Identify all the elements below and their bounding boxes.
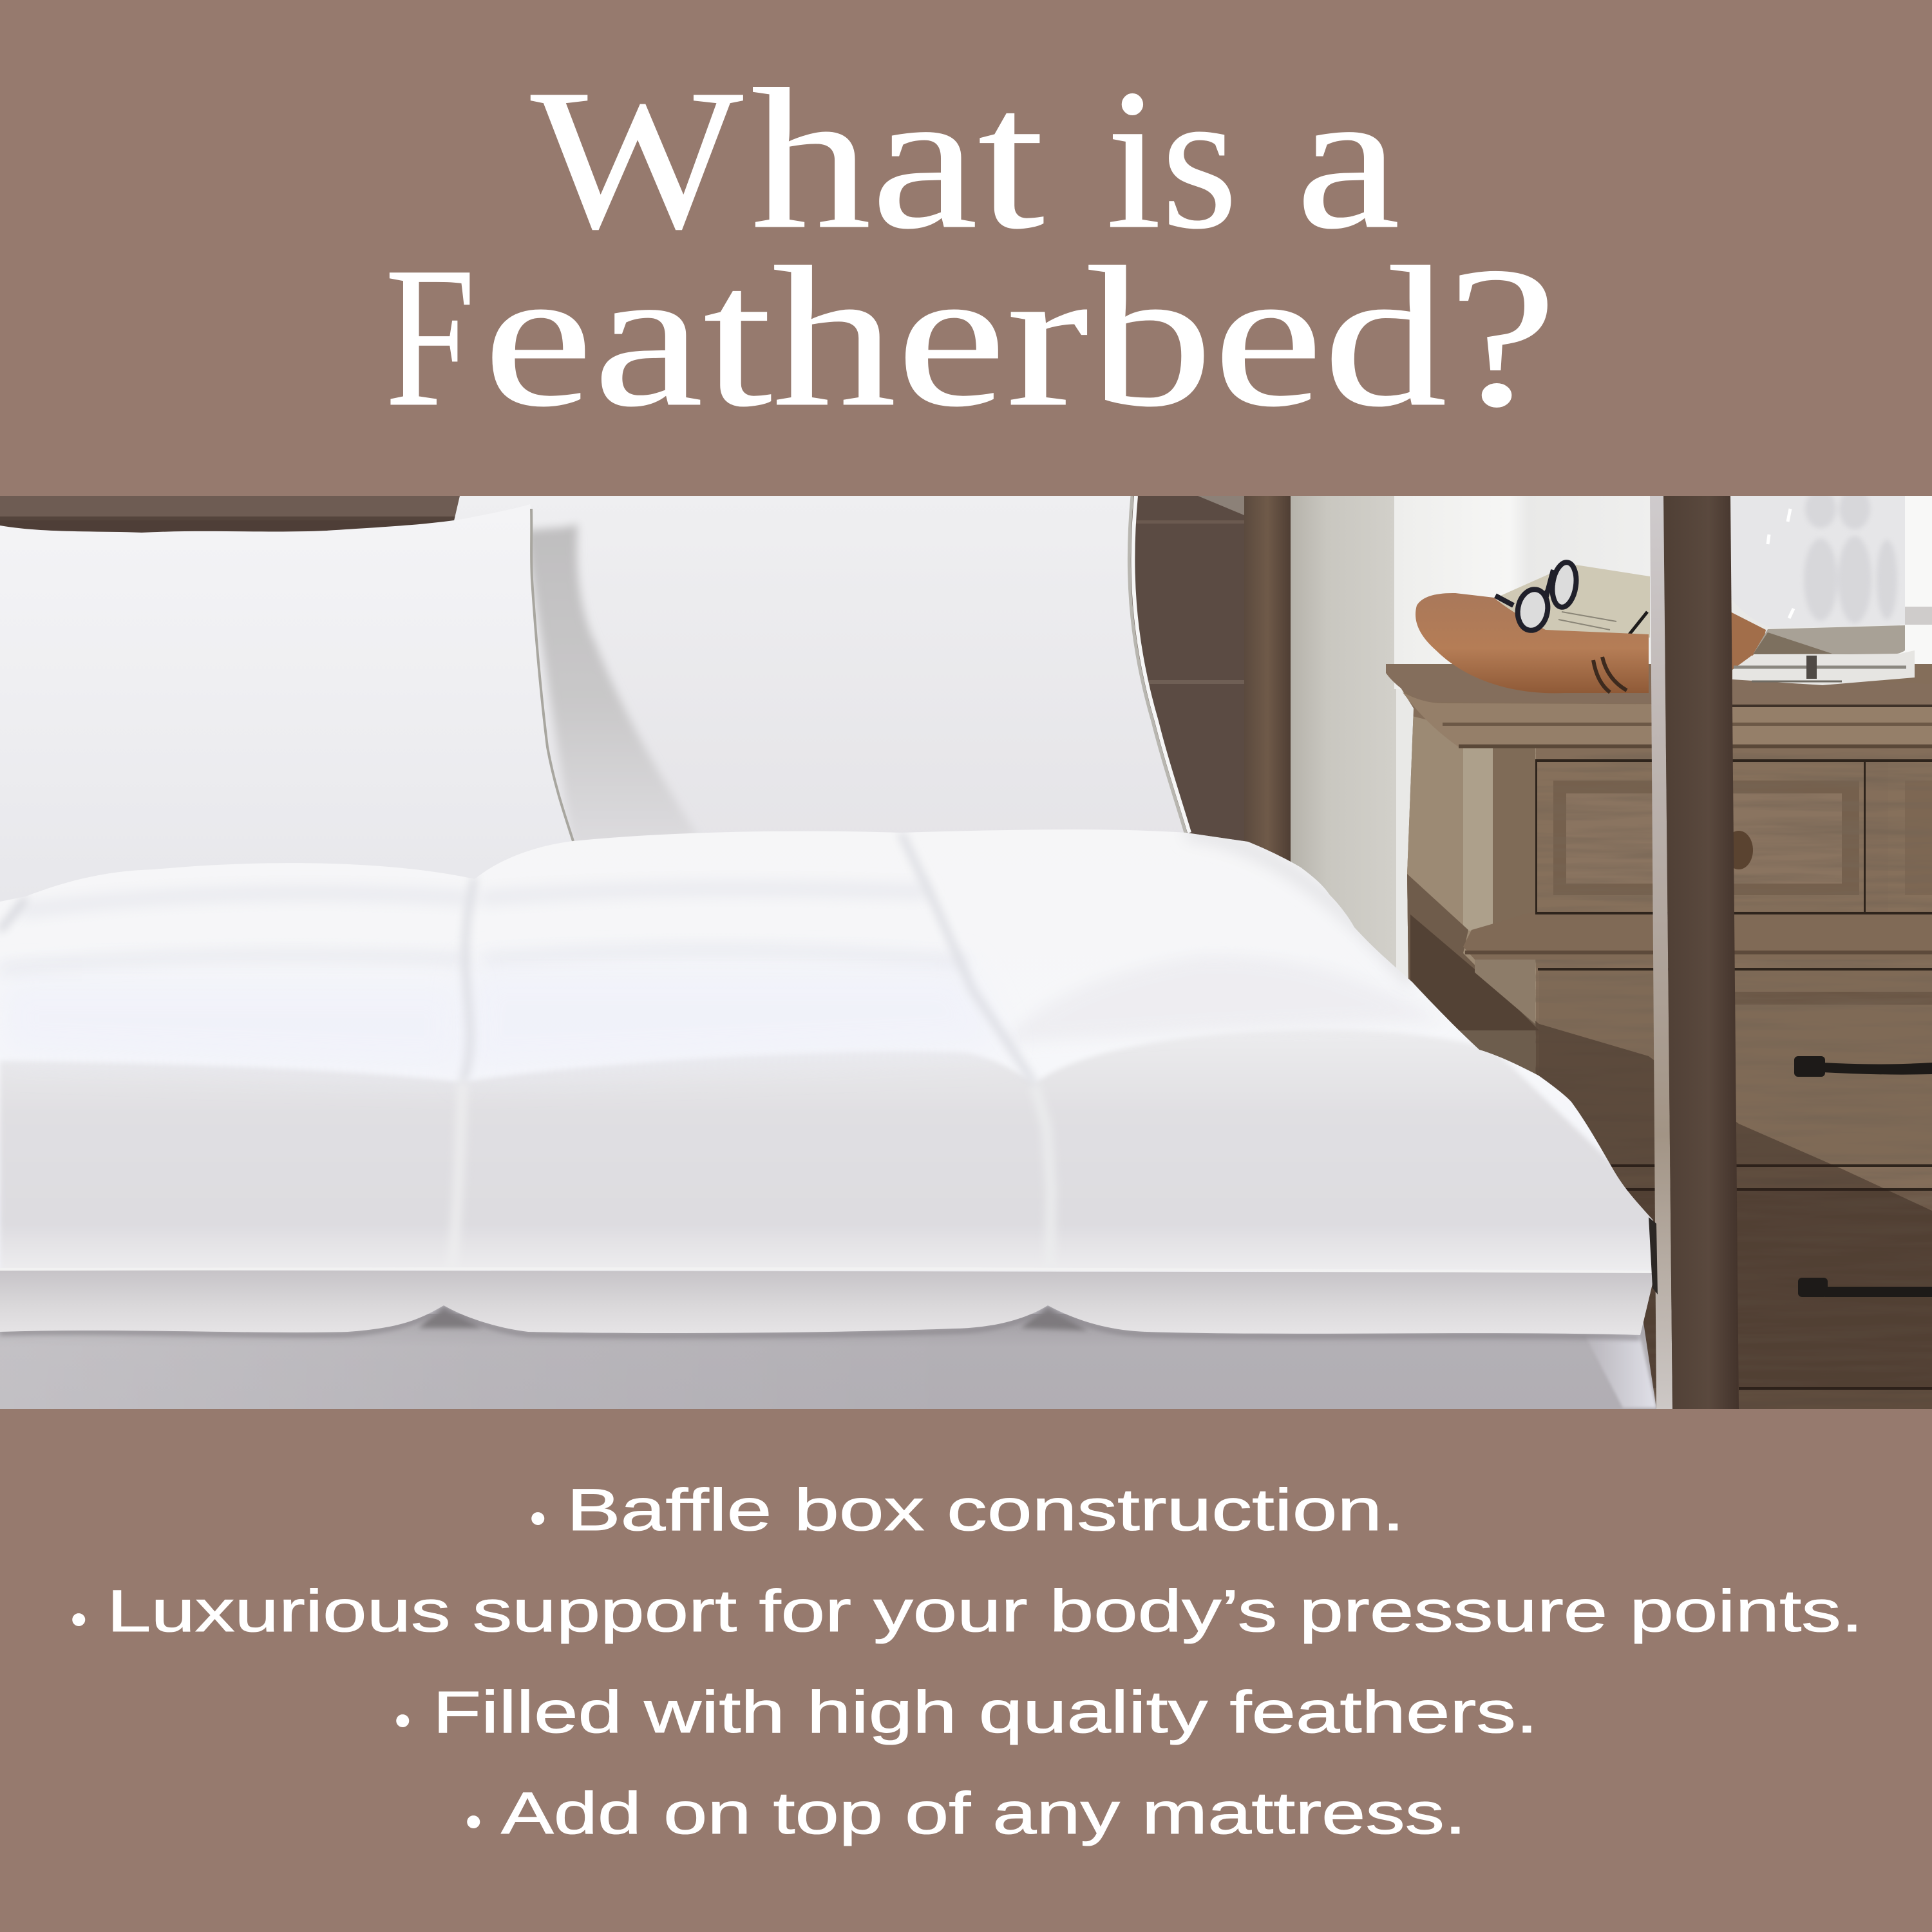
bullet: luxurious support: Luxurious support for your body’s pressure points. [107, 1578, 1863, 1644]
bed post [1244, 496, 1291, 876]
skirt below topper [0, 1314, 1656, 1409]
acrylic plinth [1732, 650, 1915, 685]
foreground post [1649, 496, 1739, 1409]
cool tint [462, 966, 1005, 1075]
side lower dark [1407, 874, 1539, 1030]
bullet: add on top: • [466, 1796, 482, 1846]
topper side band [0, 1270, 1655, 1335]
lamp [1729, 488, 1915, 685]
bowl [1416, 593, 1649, 693]
title: W [531, 48, 745, 270]
paper [1494, 564, 1650, 638]
title: F [385, 226, 475, 448]
photo: featherbed on bed [0, 488, 1932, 1410]
title: hat [751, 48, 1045, 270]
side of nightstand [1407, 715, 1536, 1095]
bullet: filled with feathers: • [395, 1695, 411, 1745]
bullet: filled with feathers: Filled with high quality feathers. [433, 1680, 1538, 1745]
bullet: baffle box: • [530, 1493, 546, 1543]
lamp base [1753, 625, 1905, 654]
back pillow [451, 496, 1189, 914]
top [1386, 664, 1401, 688]
bullet list [71, 1477, 1863, 1846]
right panel arc [1005, 955, 1443, 1043]
title: eatherbed? [483, 226, 1557, 448]
left pillow [0, 504, 574, 927]
shadow under topper [0, 1307, 1640, 1338]
top edge shade [1186, 833, 1412, 982]
bullet: luxurious support: • [71, 1594, 87, 1644]
title: a [1296, 48, 1400, 270]
nightstand [1385, 663, 1932, 1410]
wall background [1291, 496, 1932, 979]
headboard left [0, 496, 460, 533]
drawer lines [1535, 759, 1932, 1390]
grain [1535, 756, 1932, 1174]
pillow shadow [525, 524, 699, 850]
drawers [1535, 761, 1865, 913]
bowl with paper and glasses [1416, 561, 1766, 693]
bullet: add on top: Add on top of any mattress. [501, 1781, 1466, 1846]
nightstand shadow [1410, 914, 1932, 1409]
band seam highlight [0, 1269, 1654, 1272]
skirt left highlight [0, 1314, 966, 1409]
vertical baffle seams [0, 833, 1051, 1278]
bullet: baffle box: Baffle box construction. [567, 1477, 1405, 1543]
upper creases [0, 889, 966, 969]
title: is [1106, 48, 1238, 270]
headboard right [1131, 496, 1244, 841]
drawer handles [1794, 1056, 1932, 1297]
glasses [1495, 561, 1579, 633]
lit stripe on lower side [1475, 960, 1535, 1024]
bowl right part [1730, 612, 1766, 670]
lower panels [0, 1030, 1674, 1272]
skirt fold [1586, 1334, 1656, 1408]
drawer knob [1734, 831, 1753, 869]
title [385, 48, 1557, 448]
featherbed topper [0, 824, 1674, 1340]
notch shadows [419, 1305, 1088, 1331]
